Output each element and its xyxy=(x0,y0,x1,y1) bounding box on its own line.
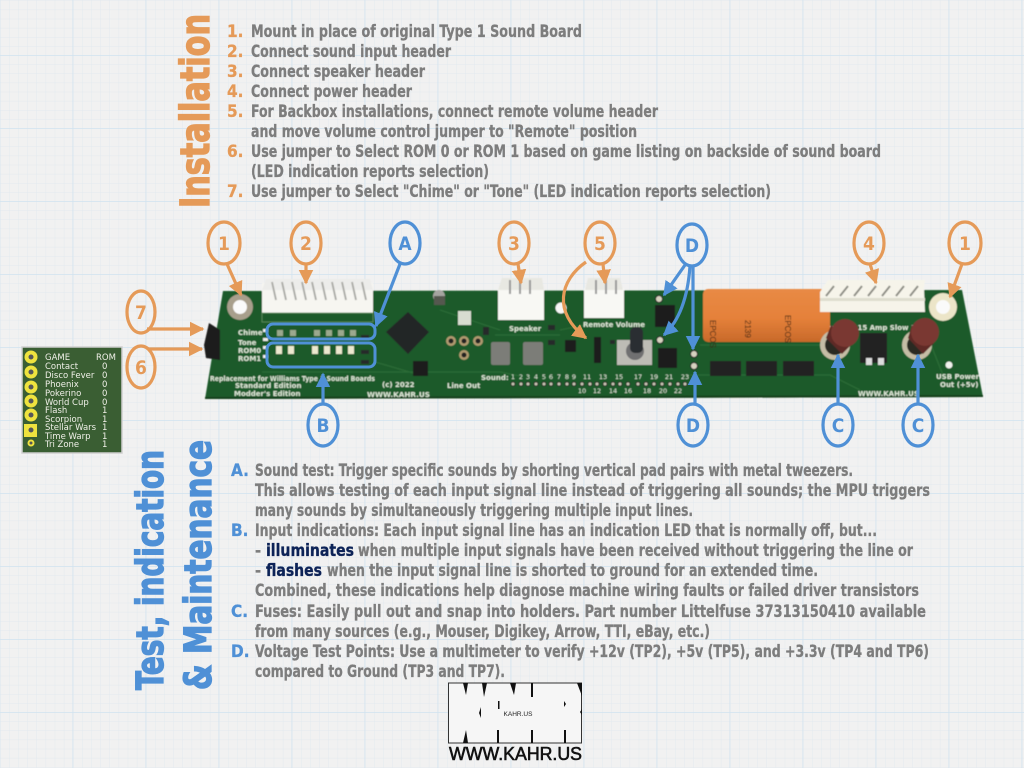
callout A xyxy=(376,222,420,326)
callout 6 xyxy=(127,346,202,388)
test and maintenance notes xyxy=(231,461,930,681)
installation steps list: 3. xyxy=(227,62,243,82)
mounting hole left xyxy=(227,294,253,320)
callout 1 left xyxy=(208,222,241,295)
board silkscreen text: USB Power xyxy=(936,373,980,381)
heading: Test, indication & Maintenance: Test, indication xyxy=(129,450,172,690)
orange capacitor: EPCOS xyxy=(708,320,717,348)
callout B: B xyxy=(316,415,330,437)
KAHR logo xyxy=(448,683,582,764)
installation steps list: 4. xyxy=(227,82,243,102)
callout 2: 2 xyxy=(300,233,312,255)
orange capacitor: 2139 xyxy=(743,320,752,338)
heading: Test, indication & Maintenance xyxy=(129,440,220,690)
fuse right xyxy=(902,318,939,360)
sound input pin row: 2 xyxy=(519,373,523,381)
installation steps list: For Backbox installations, connect remote volume header xyxy=(251,102,659,121)
test and maintenance notes: - xyxy=(255,561,261,580)
test and maintenance notes: many sounds by simultaneously triggering multiple input lines. xyxy=(255,501,693,520)
installation steps list: Use jumper to Select "Chime" or "Tone" (LED indication reports selection) xyxy=(251,182,771,201)
game and ROM table: Time Warp xyxy=(44,432,90,442)
sound input pin row: 7 xyxy=(557,373,561,381)
sound input pin row: 17 xyxy=(634,373,642,381)
sound input pin row: 23 xyxy=(681,373,689,381)
callout 1 right xyxy=(949,222,981,297)
KAHR logo: WWW.KAHR.US xyxy=(449,744,582,764)
callout B xyxy=(308,374,338,446)
sound input pin row: 9 xyxy=(572,373,576,381)
installation steps list: Mount in place of original Type 1 Sound Board xyxy=(251,22,582,41)
callout D bottom xyxy=(678,372,708,446)
installation steps list: 6. xyxy=(227,142,243,162)
sound input pin row: 8 xyxy=(565,373,569,381)
sound input pin row: 16 xyxy=(624,387,632,395)
sound input pin row: 21 xyxy=(665,373,673,381)
callout 7 xyxy=(127,291,203,333)
callout A: A xyxy=(398,233,412,255)
sound input pin row: 10 xyxy=(578,387,586,395)
test and maintenance notes: Sound test: Trigger specific sounds by shorting vertical pad pairs with metal tweezers. xyxy=(255,461,853,480)
sound input pin row: 1 xyxy=(511,373,515,381)
installation steps list xyxy=(227,22,881,202)
sound input pin row: 3 xyxy=(526,373,530,381)
board silkscreen text: WWW.KAHR.US xyxy=(858,390,919,398)
game and ROM table: 0 xyxy=(102,380,107,390)
game and ROM table: 1 xyxy=(102,406,107,416)
potentiometer xyxy=(617,327,652,365)
game and ROM table: Flash xyxy=(45,406,67,416)
game and ROM table: Pokerino xyxy=(45,389,81,399)
test and maintenance notes: when the input signal line is shorted to ground for an extended time. xyxy=(327,561,818,580)
game and ROM table: World Cup xyxy=(45,398,89,408)
sound input pin row: 15 xyxy=(615,373,623,381)
board silkscreen text xyxy=(210,321,980,399)
installation steps list: Connect power header xyxy=(251,82,413,101)
mounting hole right xyxy=(929,293,957,321)
sound input pin row: 6 xyxy=(549,373,553,381)
game and ROM table: GAME xyxy=(45,353,70,363)
board silkscreen text: Replacement for Williams Type 1 Sound Boards xyxy=(210,375,375,383)
USB LED xyxy=(946,362,952,368)
sound input pin row: 12 xyxy=(593,387,601,395)
test and maintenance notes: when multiple input signals have been received without triggering the line or xyxy=(358,541,914,560)
test and maintenance notes: from many sources (e.g., Mouser, Digikey, Arrow, TTI, eBay, etc.) xyxy=(255,622,710,641)
sound input pin row: 13 xyxy=(599,373,607,381)
test and maintenance notes: illuminates xyxy=(266,541,354,560)
game and ROM table: Phoenix xyxy=(45,380,79,390)
sound input pin row: 5 xyxy=(542,373,546,381)
test and maintenance notes: - xyxy=(255,541,261,560)
game and ROM table: 1 xyxy=(102,440,107,450)
callout 4 xyxy=(854,222,884,283)
test points xyxy=(656,296,698,370)
test and maintenance notes: D. xyxy=(231,642,250,662)
board silkscreen text: Remote Volume xyxy=(583,321,645,329)
game and ROM table: Scorpion xyxy=(45,415,82,425)
installation steps list: and move volume control jumper to "Remote" position xyxy=(251,122,637,141)
board silkscreen text: Speaker xyxy=(509,325,542,333)
callout 4: 4 xyxy=(863,233,875,255)
test and maintenance notes: This allows testing of each input signal line instead of triggering all sounds; the MPU triggers xyxy=(255,481,930,500)
sound input pin row: 18 xyxy=(643,387,651,395)
game and ROM table: 0 xyxy=(102,362,107,372)
callout 1 left: 1 xyxy=(218,233,230,255)
fuse left xyxy=(820,319,859,360)
heading: Test, indication & Maintenance: & Maintenance xyxy=(177,440,220,690)
highlight box: input LEDs xyxy=(267,343,375,367)
game and ROM table: Tri Zone xyxy=(44,440,79,450)
sound input pin row xyxy=(481,373,689,395)
test and maintenance notes: C. xyxy=(231,602,248,622)
sound input pin row: Sound: xyxy=(481,374,509,382)
board silkscreen text: Standard Edition xyxy=(235,382,301,390)
installation steps list: Use jumper to Select ROM 0 or ROM 1 based on game listing on backside of sound board xyxy=(251,142,881,161)
board silkscreen text: Out (+5v) xyxy=(940,381,978,389)
test and maintenance notes: compared to Ground (TP3 and TP7). xyxy=(255,662,505,681)
game and ROM table: Stellar Wars xyxy=(45,423,97,433)
callout D bottom: D xyxy=(686,415,700,437)
mounting hole centre xyxy=(556,302,566,314)
ROM listing panel xyxy=(22,347,122,453)
test and maintenance notes: B. xyxy=(231,521,248,541)
installation steps list: (LED indication reports selection) xyxy=(251,162,489,181)
callout C right xyxy=(903,355,933,446)
blue callouts xyxy=(308,222,933,446)
test and maintenance notes: Fuses: Easily pull out and snap into holders. Part number Littelfuse 37313150410 available xyxy=(255,602,926,621)
test and maintenance notes: Input indications: Each input signal line has an indication LED that is normally off, but... xyxy=(255,521,877,540)
black jumper xyxy=(204,323,220,360)
callout 5 xyxy=(563,222,615,338)
installation steps list: Connect speaker header xyxy=(251,62,426,81)
callout 3 xyxy=(499,222,529,283)
installation steps list: 1. xyxy=(227,22,243,42)
driver ICs xyxy=(710,361,814,376)
audio jack and small cap xyxy=(413,290,483,376)
callout D top xyxy=(664,224,707,349)
sound input pin row: 11 xyxy=(583,373,591,381)
callout 7: 7 xyxy=(135,302,147,324)
callout 2 xyxy=(291,222,321,283)
game and ROM table: 0 xyxy=(102,398,107,408)
test and maintenance notes: A. xyxy=(231,461,249,481)
callout C right: C xyxy=(912,415,924,437)
mode labels and jumper pads: Tone xyxy=(238,339,257,347)
sound input pin row: 22 xyxy=(674,387,682,395)
mode labels and jumper pads xyxy=(238,329,268,363)
board silkscreen text: (c) 2022 xyxy=(382,381,415,389)
game and ROM table: 1 xyxy=(102,432,107,442)
sound input pin row: 14 xyxy=(609,387,617,395)
game and ROM table: Contact xyxy=(45,362,79,372)
board silkscreen text: Modder's Edition xyxy=(234,390,300,398)
callout D top: D xyxy=(685,235,699,257)
test and maintenance notes: Combined, these indications help diagnose machine wiring faults or failed driver transistors xyxy=(255,581,919,600)
installation steps list: 7. xyxy=(227,182,243,202)
callout 5: 5 xyxy=(594,233,606,255)
mode labels and jumper pads: ROM0 xyxy=(238,347,261,355)
orange capacitor: EPCOS xyxy=(783,315,792,343)
game and ROM table xyxy=(44,353,116,450)
board silkscreen text: Line Out xyxy=(447,382,481,390)
game and ROM table: 1 xyxy=(102,415,107,425)
sound input header xyxy=(262,279,373,322)
KAHR logo: KAHR.US xyxy=(504,711,533,718)
orange capacitor xyxy=(703,289,830,348)
board silkscreen text: WWW.KAHR.US xyxy=(367,391,430,399)
mode labels and jumper pads: ROM1 xyxy=(238,355,261,363)
game and ROM table: 0 xyxy=(102,371,107,381)
game and ROM table: 0 xyxy=(102,389,107,399)
callout 3: 3 xyxy=(508,233,520,255)
mode labels and jumper pads: Chime xyxy=(238,329,263,337)
remote volume header xyxy=(584,278,624,318)
highlight box: sound test pads xyxy=(267,324,375,339)
callout 6: 6 xyxy=(135,357,147,379)
callout 1 right: 1 xyxy=(959,233,971,255)
orange callouts xyxy=(127,222,981,388)
test pads and LEDs xyxy=(276,330,356,354)
sound input pin row: 19 xyxy=(650,373,658,381)
game and ROM table: Disco Fever xyxy=(45,371,95,381)
installation steps list: 5. xyxy=(227,102,243,122)
microcontroller chip xyxy=(386,312,429,354)
sound input pin row: 20 xyxy=(659,387,667,395)
inductors xyxy=(491,342,543,365)
installation steps list: Connect sound input header xyxy=(251,42,452,61)
callout C left xyxy=(823,355,853,446)
callout C left: C xyxy=(832,415,844,437)
speaker header xyxy=(498,278,544,320)
regulator xyxy=(860,333,887,365)
small parts near volume xyxy=(565,305,677,368)
board silkscreen text: Fuses 3.15 Amp Slow Blow xyxy=(825,324,930,332)
sound input pin row: 4 xyxy=(534,373,538,381)
small SMD parts xyxy=(361,325,615,364)
yellow pads xyxy=(24,350,38,446)
game and ROM table: ROM xyxy=(96,353,116,363)
game and ROM table: 1 xyxy=(102,423,107,433)
installation steps list: 2. xyxy=(227,42,243,62)
power header xyxy=(820,280,925,312)
circuit board photo xyxy=(204,278,983,399)
test and maintenance notes: flashes xyxy=(266,561,322,580)
